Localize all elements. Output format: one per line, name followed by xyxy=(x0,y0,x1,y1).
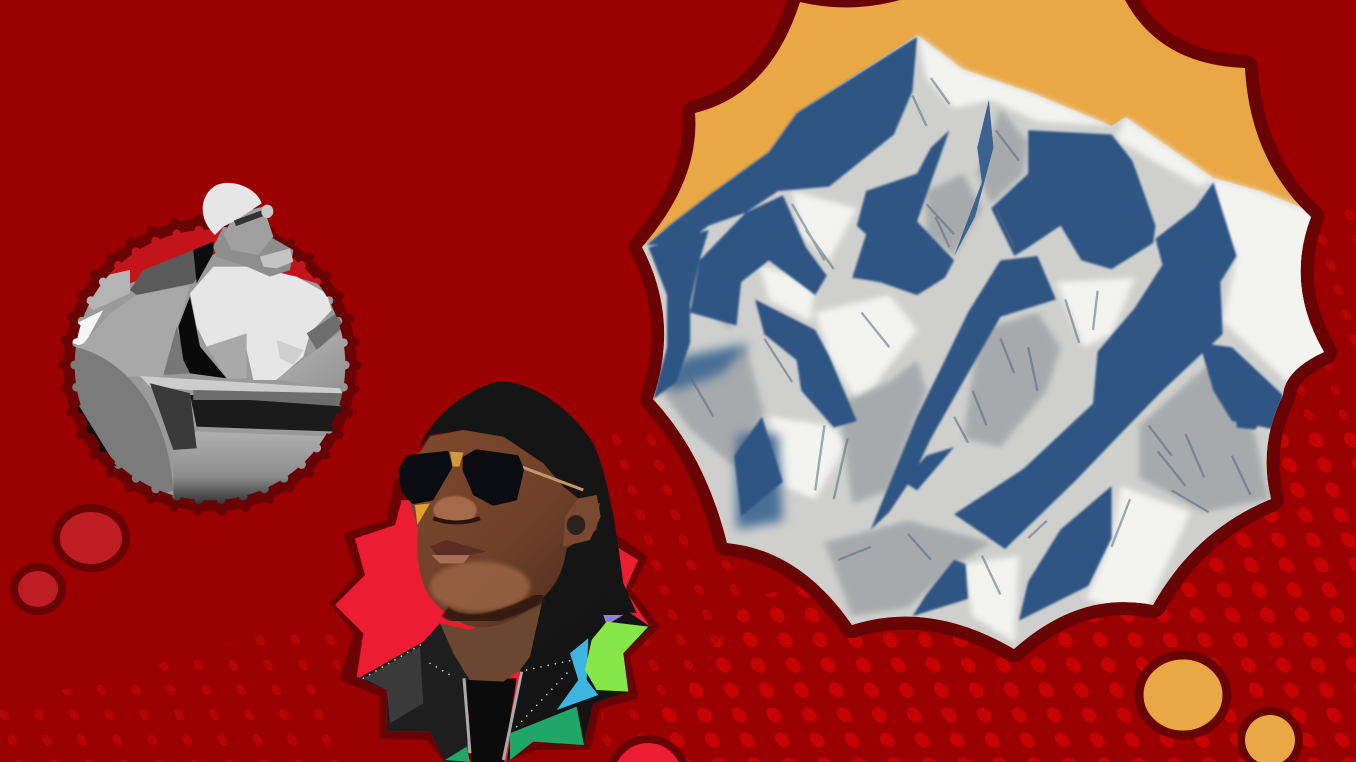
snow base xyxy=(630,35,1352,677)
blue panel xyxy=(557,638,598,710)
jacket shade xyxy=(207,333,247,378)
red star burst xyxy=(335,500,650,762)
zipper left xyxy=(464,678,470,753)
head wrap and hood xyxy=(420,382,637,657)
orange sky xyxy=(642,0,1324,649)
right lens xyxy=(465,452,522,503)
lower body xyxy=(173,432,337,507)
t-shirt xyxy=(467,678,517,762)
rear deck xyxy=(276,332,348,382)
glasses temple xyxy=(523,467,583,490)
thought bubble: large left red xyxy=(56,508,126,568)
cap xyxy=(203,183,262,235)
jacket right xyxy=(507,597,650,762)
black panel xyxy=(190,395,347,432)
seat black xyxy=(178,297,227,378)
chin shadow xyxy=(445,597,543,620)
left lens xyxy=(401,453,450,502)
hand xyxy=(277,340,303,365)
bottom green panel xyxy=(445,747,470,762)
lower lip xyxy=(432,555,470,563)
wheel shadow xyxy=(78,406,116,466)
red sky xyxy=(109,226,322,286)
zipper right xyxy=(503,672,522,760)
thought bubble: large orange xyxy=(1139,655,1227,735)
goggles xyxy=(235,212,267,223)
yellow reflection xyxy=(415,503,430,525)
seat grey xyxy=(163,327,190,375)
jacket sheen xyxy=(363,647,423,723)
face xyxy=(400,430,600,627)
fender dark xyxy=(150,383,197,450)
Stevie Wonder portrait bubble xyxy=(330,382,660,762)
white glare xyxy=(70,310,103,347)
masked car picture xyxy=(70,226,350,504)
upper lip xyxy=(430,540,487,555)
black strip xyxy=(193,242,213,283)
nose highlight xyxy=(433,496,477,524)
thought bubble: bottom centre red xyxy=(609,735,687,762)
purple panel xyxy=(603,615,623,625)
blue haze xyxy=(653,343,783,529)
outer scalloped ring xyxy=(63,218,357,512)
jacket studs xyxy=(363,643,573,727)
earpiece xyxy=(567,515,585,535)
thought bubble: small orange xyxy=(1237,707,1303,762)
mountain bubble xyxy=(630,0,1352,677)
scarf goggles xyxy=(260,248,293,268)
thought bubble: small left red xyxy=(14,567,62,611)
bubble outline xyxy=(642,0,1324,649)
green panel xyxy=(510,707,584,760)
base fill xyxy=(72,254,348,499)
neck xyxy=(440,597,543,682)
jacket left xyxy=(358,623,470,762)
star outline xyxy=(330,478,660,762)
bright ridges xyxy=(760,35,1334,642)
mountain xyxy=(630,35,1352,677)
thin shadow xyxy=(954,100,993,256)
grey shading xyxy=(658,108,1269,616)
racing driver bubble xyxy=(58,182,362,516)
cheek highlight xyxy=(430,562,530,612)
face xyxy=(223,207,273,255)
glove xyxy=(307,313,343,350)
light trim xyxy=(140,376,342,394)
dark cockpit band xyxy=(130,242,213,295)
neck and scarf xyxy=(213,227,293,277)
light windshield xyxy=(83,270,130,310)
halftone dots xyxy=(0,205,1356,762)
bridge xyxy=(450,452,463,467)
jacket xyxy=(190,267,332,380)
goggle lens xyxy=(261,205,273,218)
panel highlight xyxy=(193,390,345,407)
ridge texture xyxy=(686,78,1250,595)
car body upper xyxy=(67,285,190,377)
blue shadows xyxy=(646,37,1283,621)
driver head xyxy=(203,183,293,277)
ear xyxy=(563,495,601,547)
nostril xyxy=(433,518,480,522)
wheel xyxy=(70,347,173,494)
lime panel xyxy=(585,622,648,692)
